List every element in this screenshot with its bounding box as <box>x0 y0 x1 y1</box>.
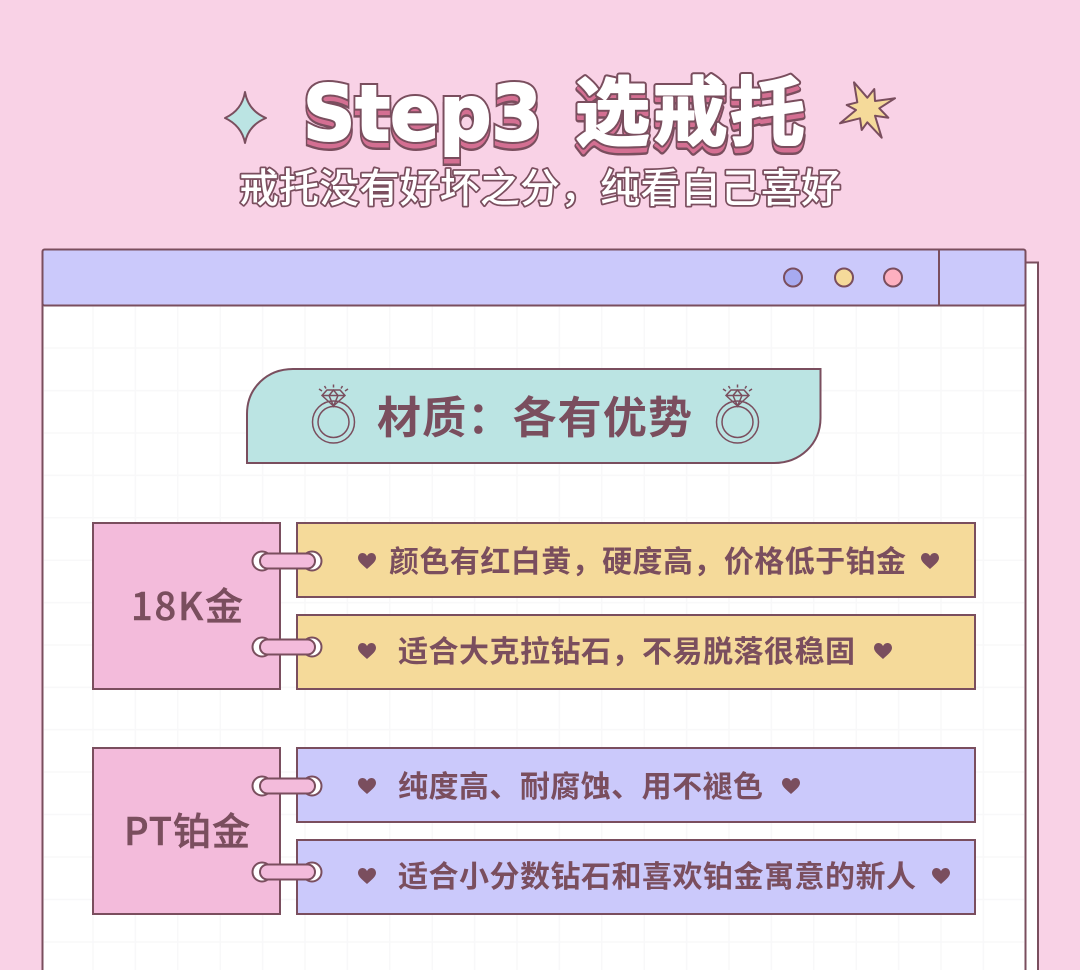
binder ring top <box>252 776 322 796</box>
panel: PT platinum <box>93 748 975 914</box>
panel: 18K gold <box>93 523 975 689</box>
title: 选戒托 <box>575 59 805 168</box>
title: Step3 <box>303 77 542 166</box>
icon: yellow burst star <box>840 82 895 138</box>
icon: diamond ring left <box>312 384 354 443</box>
row: large carat <box>297 615 975 689</box>
title: 选戒托 <box>575 58 805 167</box>
label card: 18K金 <box>93 523 280 689</box>
panel: browser window <box>42 250 1038 970</box>
title bar <box>42 250 1026 306</box>
row: small carat: 适合小分数钻石和喜欢铂金寓意的新人 <box>398 852 916 896</box>
title: Step3 <box>303 76 542 165</box>
heading text: 材质：各有优势 <box>377 382 692 446</box>
title: 选戒托 <box>575 52 805 161</box>
title: Step3 <box>303 70 542 159</box>
heading badge <box>247 369 820 463</box>
label card: 18K金: 18K金 <box>131 576 243 631</box>
subtitle: 戒托没有好坏之分，纯看自己喜好 <box>239 156 841 214</box>
binder ring bottom <box>252 638 322 656</box>
row: purity <box>297 748 975 822</box>
binder ring bottom <box>252 862 322 882</box>
title <box>303 52 805 168</box>
icon: teal four-point sparkle <box>225 92 266 143</box>
label card: PT铂金: PT铂金 <box>124 801 250 856</box>
row: purity: 纯度高、耐腐蚀、用不褪色 <box>398 762 763 806</box>
row: colour and hardness <box>297 523 975 597</box>
row: large carat: 适合大克拉钻石，不易脱落很稳固 <box>398 627 855 671</box>
row: small carat <box>297 840 975 914</box>
icon: diamond ring right <box>716 384 758 443</box>
back page <box>60 262 1038 970</box>
window dot: yellow <box>835 268 853 286</box>
title: Step3 <box>303 70 542 159</box>
window body <box>42 300 1026 970</box>
window dot: pink <box>884 268 902 286</box>
binder ring top <box>252 552 322 570</box>
title: 选戒托 <box>575 52 805 161</box>
window dot: violet <box>784 268 802 286</box>
row: colour and hardness: 颜色有红白黄，硬度高，价格低于铂金 <box>389 537 906 581</box>
label card: PT铂金 <box>93 748 280 914</box>
